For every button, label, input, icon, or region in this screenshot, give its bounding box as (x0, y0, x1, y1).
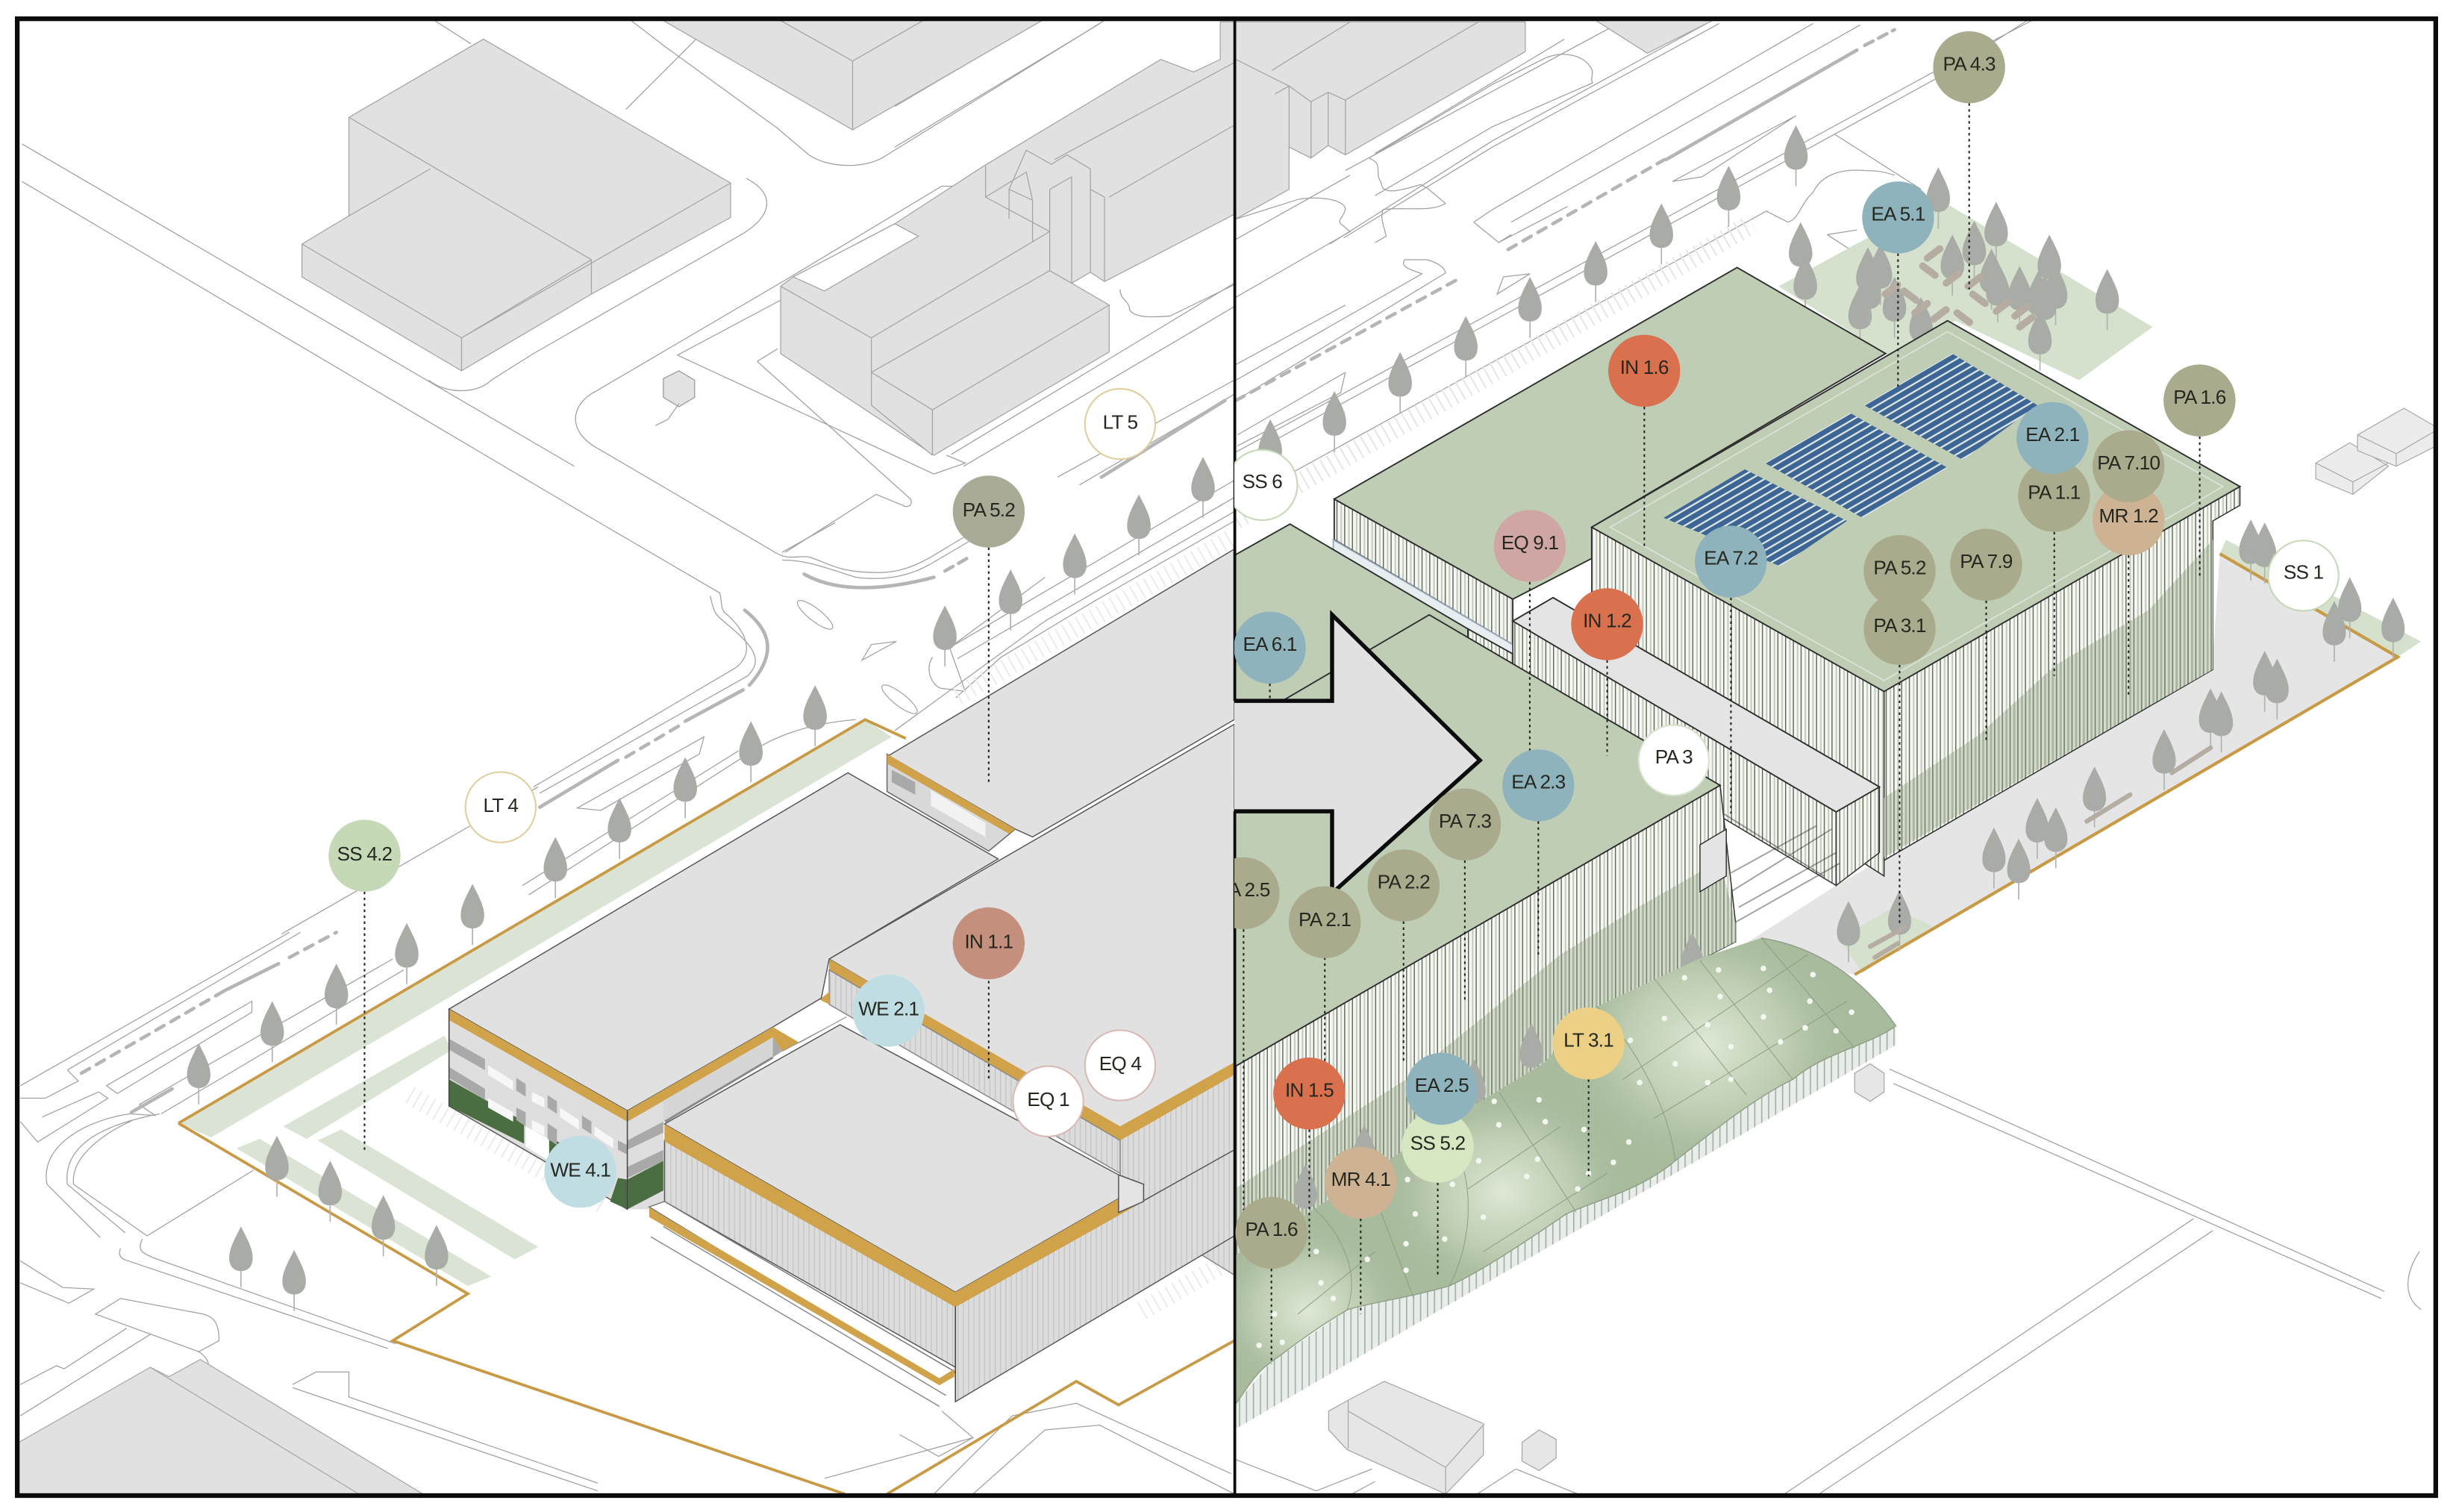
marker SS 6: SS 6 (1243, 470, 1282, 493)
marker PA 1.6 lower: PA 1.6 (1246, 1218, 1298, 1240)
marker LT 3.1 (1552, 1008, 1625, 1079)
marker SS 5.2 (1402, 1110, 1474, 1183)
scaled geometry of proposed scheme (1213, 103, 2437, 1494)
marker EA 2.1 (2016, 402, 2089, 474)
marker PA 3.1: PA 3.1 (1873, 614, 1926, 637)
trees right (1258, 125, 1807, 481)
marker IN 1.6: IN 1.6 (1620, 356, 1669, 378)
green dome roof (1213, 920, 1916, 1440)
marker IN 1.1: IN 1.1 (964, 930, 1013, 952)
facade: main block striped walls (1592, 487, 2240, 876)
building: middle roof block (819, 725, 1234, 1275)
marker SS 5.2: SS 5.2 (1410, 1132, 1466, 1155)
marker PA 1.6 lower (1235, 1197, 1307, 1269)
marker EA 5.1: EA 5.1 (1871, 203, 1925, 225)
marker WE 4.1: WE 4.1 (550, 1158, 610, 1181)
marker PA 3: PA 3 (1655, 746, 1693, 768)
gray neighbouring building, top (660, 19, 1045, 130)
marker EA 2.5: EA 2.5 (1415, 1074, 1469, 1096)
marker EQ 9.1 (1494, 510, 1566, 582)
marker MR 1.2: MR 1.2 (2099, 504, 2158, 527)
marker PA 5.2: PA 5.2 (963, 499, 1015, 521)
marker PA 1.6 upper: PA 1.6 (2173, 386, 2226, 408)
roof: front-left block (1234, 615, 1720, 1067)
leader lines left (364, 548, 989, 1153)
gray neighbouring building, upper-left (302, 39, 731, 371)
small gray boxes top right (2316, 408, 2437, 494)
roof: main block (1592, 321, 2240, 692)
marker IN 1.5 (1273, 1058, 1346, 1129)
marker PA 4.3 (1933, 31, 2005, 103)
road islands (794, 596, 921, 718)
marker SS 4.2: SS 4.2 (337, 843, 393, 865)
marker PA 7.9 (1950, 529, 2022, 601)
marker SS 4.2 (328, 819, 401, 892)
marker PA 5.2 (953, 475, 1025, 548)
marker PA 2.1 (1289, 887, 1360, 958)
marker PA 7.3 (1429, 788, 1501, 860)
marker EA 7.2: EA 7.2 (1704, 547, 1758, 569)
marker EQ 9.1: EQ 9.1 (1502, 531, 1558, 554)
marker MR 1.2 (2093, 484, 2164, 555)
trees on site right (1837, 519, 2404, 962)
marker PA 5.2 right (1863, 535, 1936, 607)
marker IN 1.2: IN 1.2 (1583, 610, 1631, 632)
marker EA 7.2 (1695, 525, 1767, 598)
marker EQ 4: EQ 4 (1099, 1052, 1141, 1075)
marker IN 1.5: IN 1.5 (1285, 1078, 1334, 1101)
marker PA 1.1 (2018, 460, 2090, 532)
marker PA 4.3: PA 4.3 (1943, 52, 1996, 75)
marker IN 1.2 (1571, 588, 1643, 660)
marker EQ 1: EQ 1 (1027, 1088, 1069, 1110)
site boundary and green strips (178, 719, 1234, 1494)
parking hatch right (1236, 224, 1752, 519)
gray small building bottom (1328, 1063, 1884, 1494)
marker EA 2.1: EA 2.1 (2025, 423, 2080, 446)
marker LT 5: LT 5 (1103, 410, 1138, 433)
road network right (1236, 21, 2031, 472)
marker labels: left panel (328, 389, 1155, 1208)
marker PA 7.3: PA 7.3 (1439, 810, 1491, 832)
median dashes right (1236, 30, 1895, 401)
marker EA 2.3 (1502, 749, 1574, 822)
median dashes left (81, 401, 1225, 1112)
gray ground and site boundary (1739, 540, 2421, 975)
gray neighbouring building, right-top (1234, 20, 1713, 219)
bottom road lines (1236, 1069, 2421, 1494)
marker PA 3.1 (1863, 593, 1936, 665)
building: rear roof block (887, 549, 1234, 851)
marker MR 4.1 (1325, 1147, 1397, 1219)
marker EA 6.1: EA 6.1 (1243, 633, 1297, 655)
gray neighbouring building, middle with tower (781, 22, 1234, 455)
marker PA 2.5 (1207, 857, 1280, 929)
marker SS 6 (1227, 450, 1297, 520)
green park with trees (1778, 167, 2152, 380)
marker EA 6.1 (1234, 612, 1306, 684)
marker PA 7.10: PA 7.10 (2097, 452, 2160, 474)
building: left roof block and facade (449, 773, 998, 1209)
roof: rear green block with terrace (1334, 267, 1886, 657)
marker EA 2.3: EA 2.3 (1511, 770, 1566, 793)
marker PA 1.1: PA 1.1 (2028, 481, 2081, 504)
marker WE 2.1: WE 2.1 (858, 997, 919, 1019)
marker MR 4.1: MR 4.1 (1331, 1168, 1390, 1190)
facade: front-left block wall (1234, 785, 1736, 1270)
marker IN 1.1 (953, 907, 1025, 979)
marker PA 7.9: PA 7.9 (1960, 550, 2013, 572)
annex with gray walkway roof (1513, 598, 1879, 923)
marker EQ 1 (1013, 1066, 1084, 1137)
marker IN 1.6 (1608, 335, 1680, 407)
trees against wall (1294, 932, 1704, 1225)
marker PA 1.6 upper (2163, 364, 2236, 437)
marker PA 5.2 right: PA 5.2 (1873, 556, 1926, 578)
marker LT 5 (1085, 389, 1155, 459)
road network left (20, 19, 1234, 1494)
marker EA 5.1 (1862, 181, 1934, 254)
parking hatch left (410, 537, 1234, 1311)
panel: right half, proposed scheme (1213, 19, 2437, 1494)
marker PA 2.2: PA 2.2 (1378, 871, 1430, 893)
roof: left green blocks (1234, 524, 1513, 775)
solar panel arrays (1663, 354, 2037, 566)
marker PA 2.1: PA 2.1 (1299, 908, 1352, 931)
marker WE 2.1 (853, 975, 925, 1046)
marker LT 4 (466, 772, 536, 843)
marker LT 3.1: LT 3.1 (1563, 1028, 1613, 1051)
marker SS 1: SS 1 (2284, 561, 2324, 584)
icon: small utility cube (655, 371, 695, 425)
panel: left half, baseline scheme (19, 19, 1234, 1496)
building: front roof block and facade (649, 1025, 1234, 1407)
gray building bottom-left (19, 1360, 425, 1496)
marker EQ 4 (1085, 1030, 1155, 1101)
marker PA 2.5: PA 2.5 (1217, 878, 1270, 901)
marker PA 2.2 (1368, 849, 1440, 922)
marker WE 4.1 (545, 1136, 616, 1208)
leader lines right (1243, 103, 2200, 1364)
marker LT 4: LT 4 (484, 794, 518, 816)
marker labels: right panel (1207, 31, 2339, 1269)
trees left (187, 457, 1215, 1311)
marker PA 7.10 (2093, 430, 2164, 502)
marker SS 1 (2268, 540, 2339, 611)
marker PA 3 (1639, 725, 1709, 796)
arrow: left to right transition (1234, 615, 1480, 893)
marker EA 2.5 (1406, 1053, 1478, 1125)
